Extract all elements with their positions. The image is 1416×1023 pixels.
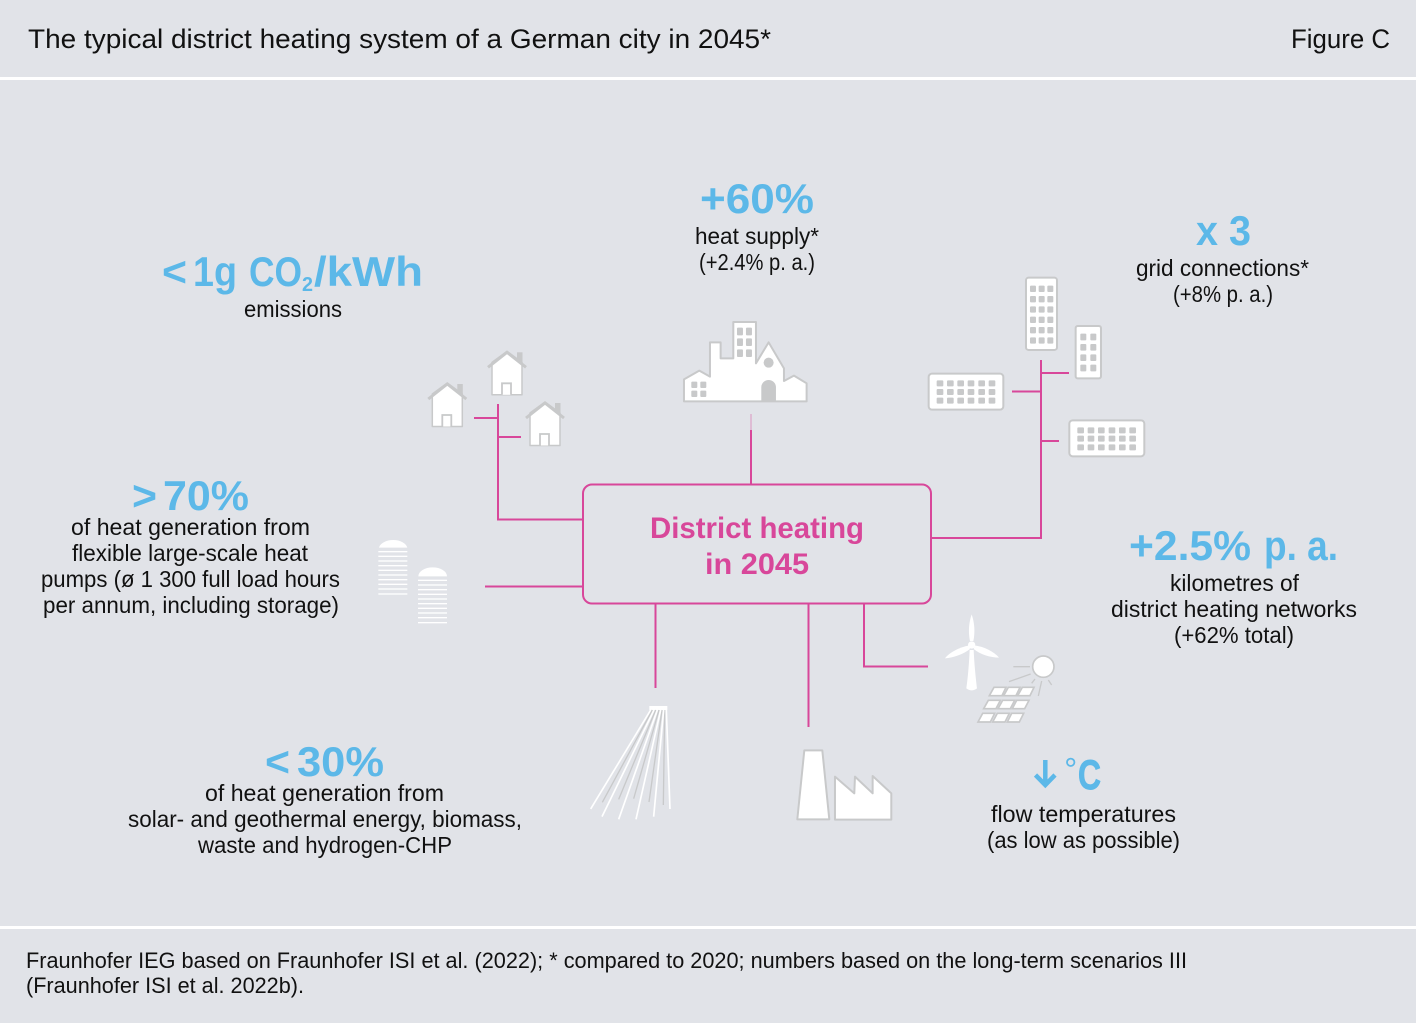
stat: heat supply (695, 175, 819, 275)
stat: flow temperatures: flow temperatures (991, 801, 1176, 827)
stat: emissions (162, 248, 423, 322)
stat: heat supply: heat supply* (695, 223, 819, 249)
stat: network length: kilometres of (1170, 570, 1300, 596)
stat: heat supply: +60% (700, 175, 814, 222)
source note (26, 948, 1187, 998)
central box: district heating (583, 484, 931, 604)
stat: heat supply: (+2.4% p. a.) (699, 249, 815, 275)
title: The typical district heating system of a German city in 2045* (28, 24, 772, 54)
stat: flow temperatures: (as low as possible) (987, 827, 1180, 853)
stat: flow temperatures: C (1078, 751, 1101, 798)
stat: network length: p. a. (1264, 522, 1338, 569)
stat: renewable generation: of heat generation from (205, 780, 444, 806)
central box: district heating: District heating (650, 512, 864, 545)
figure label: Figure C (1291, 24, 1390, 54)
stat: network length: district heating networks (1111, 596, 1357, 622)
stat: large-scale heat pumps: pumps (ø 1 300 full load hours (41, 566, 340, 592)
stat: large-scale heat pumps: of heat generation from (71, 514, 310, 540)
stat: emissions: 1g (193, 248, 237, 295)
stat: grid connections: grid connections* (1136, 255, 1309, 281)
stat: network length (1111, 522, 1357, 648)
icon: wind turbine and solar panels (945, 614, 1054, 722)
stat: grid connections: (+8% p. a.) (1173, 281, 1273, 307)
stat: large-scale heat pumps: > (132, 472, 157, 519)
icon: apartment buildings (929, 278, 1144, 456)
stat: renewable generation: 30% (297, 738, 384, 785)
stat: emissions: /kWh (314, 248, 423, 295)
stat: grid connections: x 3 (1196, 207, 1251, 254)
icon: power plant and factory (797, 750, 891, 820)
stat: network length: (+62% total) (1174, 622, 1294, 648)
icon: houses (428, 351, 564, 446)
stat: grid connections (1136, 207, 1309, 307)
stat: large-scale heat pumps: per annum, including storage) (43, 592, 339, 618)
stat: renewable generation: waste and hydrogen-CHP (197, 832, 452, 858)
stat: flow temperatures (987, 751, 1180, 853)
stat: large-scale heat pumps: flexible large-scale heat (72, 540, 309, 566)
stat: emissions: CO (249, 248, 302, 295)
stat: emissions: 2 (302, 274, 313, 296)
stat: renewable generation (128, 738, 522, 858)
stat: emissions: < (162, 248, 187, 295)
source note: (Fraunhofer ISI et al. 2022b). (26, 973, 304, 998)
central box: district heating: in 2045 (705, 548, 809, 581)
icon: solar thermal collector (591, 706, 670, 819)
stat: renewable generation: solar- and geothermal energy, biomass, (128, 806, 522, 832)
stat: large-scale heat pumps (41, 472, 340, 618)
stat: network length: +2.5% (1129, 522, 1251, 569)
icon: large-scale heat pumps (378, 540, 447, 623)
icon: city (684, 322, 807, 401)
connector lines (474, 360, 1069, 727)
source note: Fraunhofer IEG based on Fraunhofer ISI et al. (2022); * compared to 2020; numbers based on the long-term scenarios III (26, 948, 1187, 973)
stat: emissions: emissions (244, 296, 342, 322)
stat: renewable generation: < (265, 738, 290, 785)
stat: large-scale heat pumps: 70% (163, 472, 249, 519)
